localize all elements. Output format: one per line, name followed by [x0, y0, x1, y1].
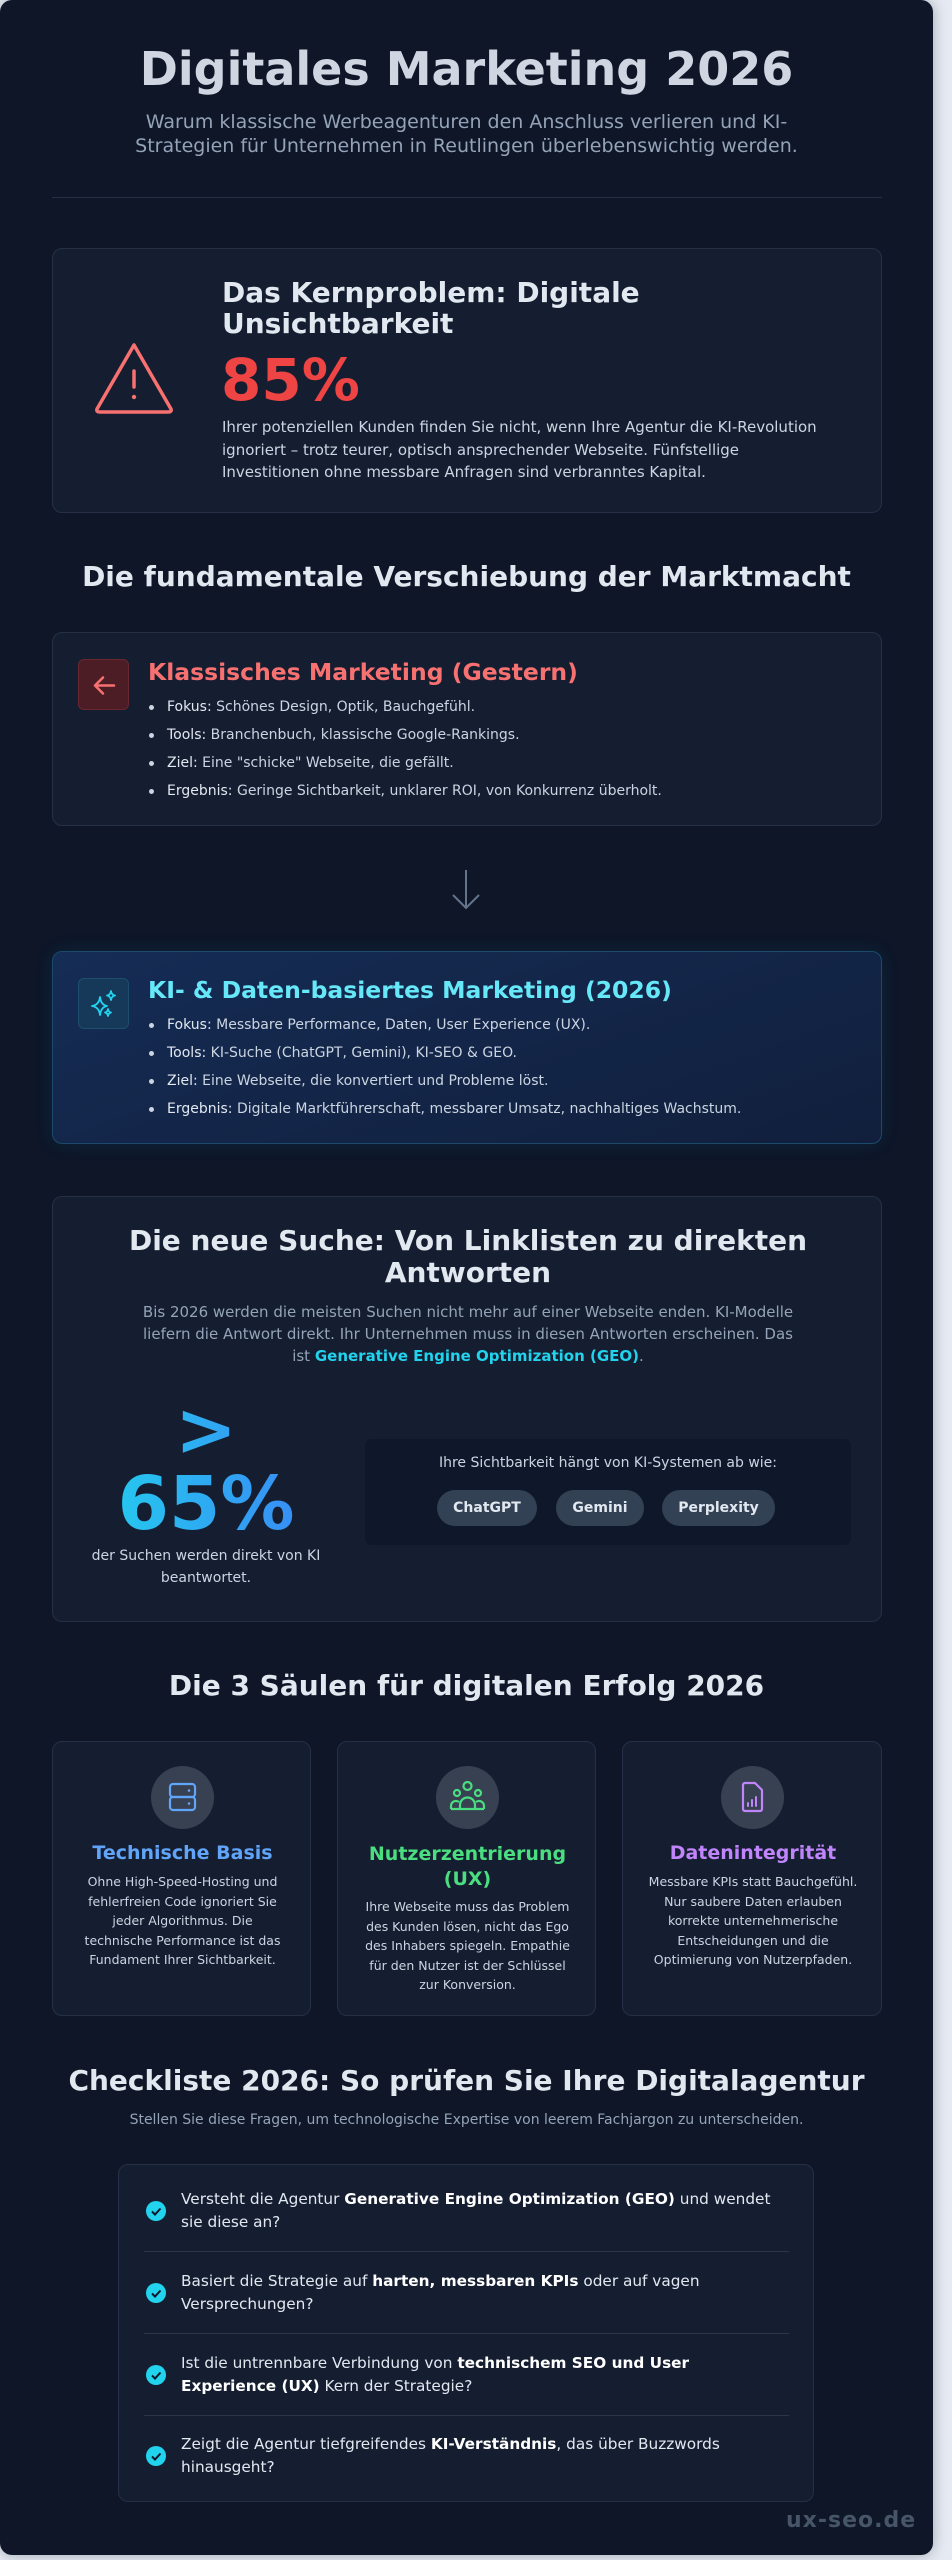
icon: arrow left	[78, 659, 129, 710]
icon: file chart	[721, 1766, 784, 1829]
footer brand: ux-seo.de	[786, 2508, 916, 2533]
panel: pillar UX: (UX)	[444, 1868, 491, 1890]
heading: Das Kernproblem: Digitale Unsichtbarkeit	[222, 276, 640, 340]
checklist item 2: Basiert die Strategie auf harten, messbaren KPIs oder auf vagen Versprechungen?	[181, 2272, 700, 2313]
stat: >65%	[92, 1387, 320, 1586]
panel: pillar data	[622, 1741, 882, 2016]
panel: pillar UX: Ihre Webseite muss das Problem des Kunden lösen, nicht das Ego des Inhabers spiegeln. Empathie für den Nutzer ist der Schlüssel zur Konversion.	[365, 1899, 570, 1992]
stat: >65%: der Suchen werden direkt von KI beantwortet.	[92, 1548, 320, 1586]
bullet list: Ziel: Eine Webseite, die konvertiert und Probleme löst.	[167, 1073, 548, 1089]
panel: new search	[52, 1196, 882, 1622]
heading: Die neue Suche: Von Linklisten zu direkten Antworten	[129, 1224, 807, 1289]
panel: pillar technical	[52, 1741, 311, 2016]
panel: AI marketing	[52, 951, 882, 1144]
panel: pillar data: Datenintegrität	[670, 1842, 836, 1864]
pills: AI systems	[437, 1490, 537, 1526]
icon: sparkles	[78, 978, 129, 1029]
checklist item 1: Versteht die Agentur Generative Engine Optimization (GEO) und wendet sie diese an?	[181, 2190, 770, 2231]
checklist item 4: Zeigt die Agentur tiefgreifendes KI-Verständnis, das über Buzzwords hinausgeht?	[181, 2435, 720, 2476]
arrow: down	[452, 870, 480, 910]
icon: warning	[95, 343, 173, 414]
paragraph: Bis 2026 werden die meisten Suchen nicht mehr auf einer Webseite enden. KI-Modelle liefern die Antwort direkt. Ihr Unternehmen muss in diesen Antworten erscheinen. Das ist Generative Engine Optimization (GEO).	[143, 1303, 793, 1365]
panel: pillar technical: Technische Basis	[92, 1842, 273, 1864]
heading: KI- & Daten-basiertes Marketing (2026)	[148, 976, 672, 1004]
bullet list	[149, 699, 662, 799]
bullet list	[149, 1017, 741, 1117]
panel: core problem	[52, 248, 882, 513]
bullet list: Tools: KI-Suche (ChatGPT, Gemini), KI-SEO & GEO.	[167, 1045, 517, 1061]
panel: pillar technical: Ohne High-Speed-Hosting und fehlerfreien Code ignoriert Sie jeder Algorithmus. Die technische Performance ist das Fundament Ihrer Sichtbarkeit.	[85, 1874, 280, 1967]
body text: Ihrer potenziellen Kunden finden Sie nicht, wenn Ihre Agentur die KI-Revolution ignoriert – trotz teurer, optisch ansprechender Webseite. Fünfstellige Investitionen ohne messbare Anfragen sind verbranntes Kapital.	[222, 418, 817, 481]
bullet list: Fokus: Messbare Performance, Daten, User Experience (UX).	[167, 1017, 590, 1033]
AI systems box: Ihre Sichtbarkeit hängt von KI-Systemen ab wie:	[439, 1455, 777, 1471]
bullet list: Fokus: Schönes Design, Optik, Bauchgefühl.	[167, 699, 475, 715]
AI systems box	[365, 1439, 851, 1545]
subtitle: Warum klassische Werbeagenturen den Anschluss verlieren und KI-Strategien für Unternehmen in Reutlingen überlebenswichtig werden.	[135, 111, 798, 157]
pills: AI systems: ChatGPT	[453, 1500, 521, 1516]
text: Perplexity	[678, 1500, 759, 1516]
panel: checklist	[118, 2164, 814, 2502]
panel: pillar UX	[337, 1741, 596, 2016]
icon: users	[436, 1766, 499, 1829]
panel: pillar data: Messbare KPIs statt Bauchgefühl. Nur saubere Daten erlauben korrekte unternehmerische Entscheidungen und die Optimierung von Nutzerpfaden.	[649, 1874, 857, 1967]
stat: >65%: >	[175, 1387, 237, 1473]
checklist subtitle: Stellen Sie diese Fragen, um technologische Expertise von leerem Fachjargon zu unterscheiden.	[130, 2112, 803, 2128]
bullet list: Tools: Branchenbuch, klassische Google-Rankings.	[167, 727, 520, 743]
heading: shift: Die fundamentale Verschiebung der Marktmacht	[82, 560, 851, 593]
panel: classic marketing	[52, 632, 882, 826]
bullet list: Ziel: Eine "schicke" Webseite, die gefällt.	[167, 755, 454, 771]
heading: pillars: Die 3 Säulen für digitalen Erfolg 2026	[169, 1669, 764, 1702]
stat: >65%: 65%	[117, 1461, 295, 1547]
panel: pillar UX: Nutzerzentrierung	[369, 1843, 566, 1865]
text: Gemini	[572, 1500, 628, 1516]
heading: checklist: Checkliste 2026: So prüfen Sie Ihre Digitalagentur	[68, 2064, 865, 2097]
bullet list: Ergebnis: Geringe Sichtbarkeit, unklarer ROI, von Konkurrenz überholt.	[167, 783, 662, 799]
checklist item 3: Ist die untrennbare Verbindung von technischem SEO und User Experience (UX) Kern der Strategie?	[181, 2354, 689, 2395]
bullet list: Ergebnis: Digitale Marktführerschaft, messbarer Umsatz, nachhaltiges Wachstum.	[167, 1101, 741, 1117]
stat 85%: 85%	[221, 346, 360, 414]
icon: server	[151, 1766, 214, 1829]
heading: Klassisches Marketing (Gestern)	[148, 658, 578, 686]
title: Digitales Marketing 2026	[140, 42, 793, 96]
